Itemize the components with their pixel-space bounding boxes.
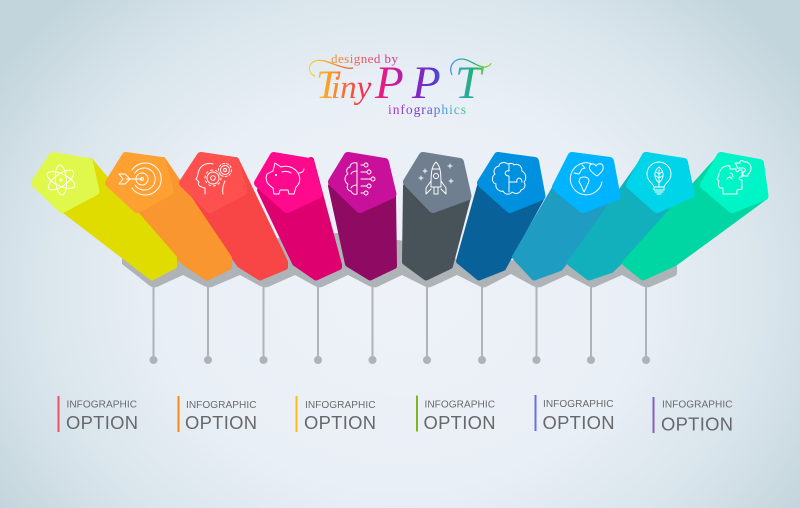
cap 1: atom	[36, 156, 95, 208]
stems and end dots	[150, 286, 650, 364]
icon: globe with heart	[570, 163, 603, 195]
option 5: OPTION	[542, 412, 614, 433]
option 1: INFOGRAPHIC	[66, 400, 137, 410]
cap 4: piggy bank	[258, 156, 318, 208]
option 3: INFOGRAPHIC	[305, 400, 376, 411]
icon: atom	[45, 165, 77, 195]
option 3	[296, 396, 376, 433]
option 5: INFOGRAPHIC	[543, 399, 614, 410]
option 6	[652, 397, 733, 434]
cap 7: brain puzzle	[482, 156, 541, 208]
option 5	[534, 395, 614, 433]
option 4	[416, 396, 496, 433]
logo: designed by Tiny PPT infographics: iny	[331, 70, 372, 106]
option 4: OPTION	[424, 412, 496, 433]
icon: head with gears	[196, 163, 232, 194]
logo: designed by Tiny PPT infographics: P	[374, 57, 404, 109]
cap 2: target	[110, 156, 169, 208]
icon: piggy bank	[266, 163, 304, 194]
icon: light bulb with leaf	[647, 162, 671, 194]
icon: puzzle brain	[492, 163, 526, 194]
option 2: INFOGRAPHIC	[186, 400, 256, 411]
icon: target with arrow	[119, 163, 161, 195]
grey base shadow	[122, 233, 677, 287]
cap 3: head with gears	[184, 156, 243, 208]
option 4: INFOGRAPHIC	[424, 400, 495, 410]
column bodies	[64, 155, 765, 278]
logo: designed by Tiny PPT infographics: T	[316, 62, 341, 107]
logo: designed by Tiny PPT infographics	[309, 51, 491, 117]
cap 10: head with puzzle	[704, 156, 764, 208]
option 3: OPTION	[304, 412, 376, 433]
logo: designed by Tiny PPT infographics: P	[411, 57, 441, 109]
icon: brain with circuit	[345, 163, 375, 195]
icon: rocket	[419, 162, 453, 194]
logo: designed by Tiny PPT infographics: infographics	[388, 102, 466, 117]
option 6: OPTION	[661, 414, 733, 434]
option 2	[178, 396, 257, 433]
cap 8: globe with heart	[556, 156, 616, 208]
option 1	[58, 396, 138, 433]
icon: head with puzzle	[717, 161, 751, 194]
logo: designed by Tiny PPT infographics: T	[455, 57, 484, 109]
cap 9: light bulb with leaf	[630, 156, 690, 208]
option 1: OPTION	[66, 412, 138, 433]
cap 5: brain circuit	[332, 156, 392, 208]
cap 6: rocket	[408, 156, 467, 208]
option 2: OPTION	[185, 412, 257, 433]
option 6: INFOGRAPHIC	[662, 400, 732, 410]
logo: designed by Tiny PPT infographics: designed by	[331, 51, 398, 66]
